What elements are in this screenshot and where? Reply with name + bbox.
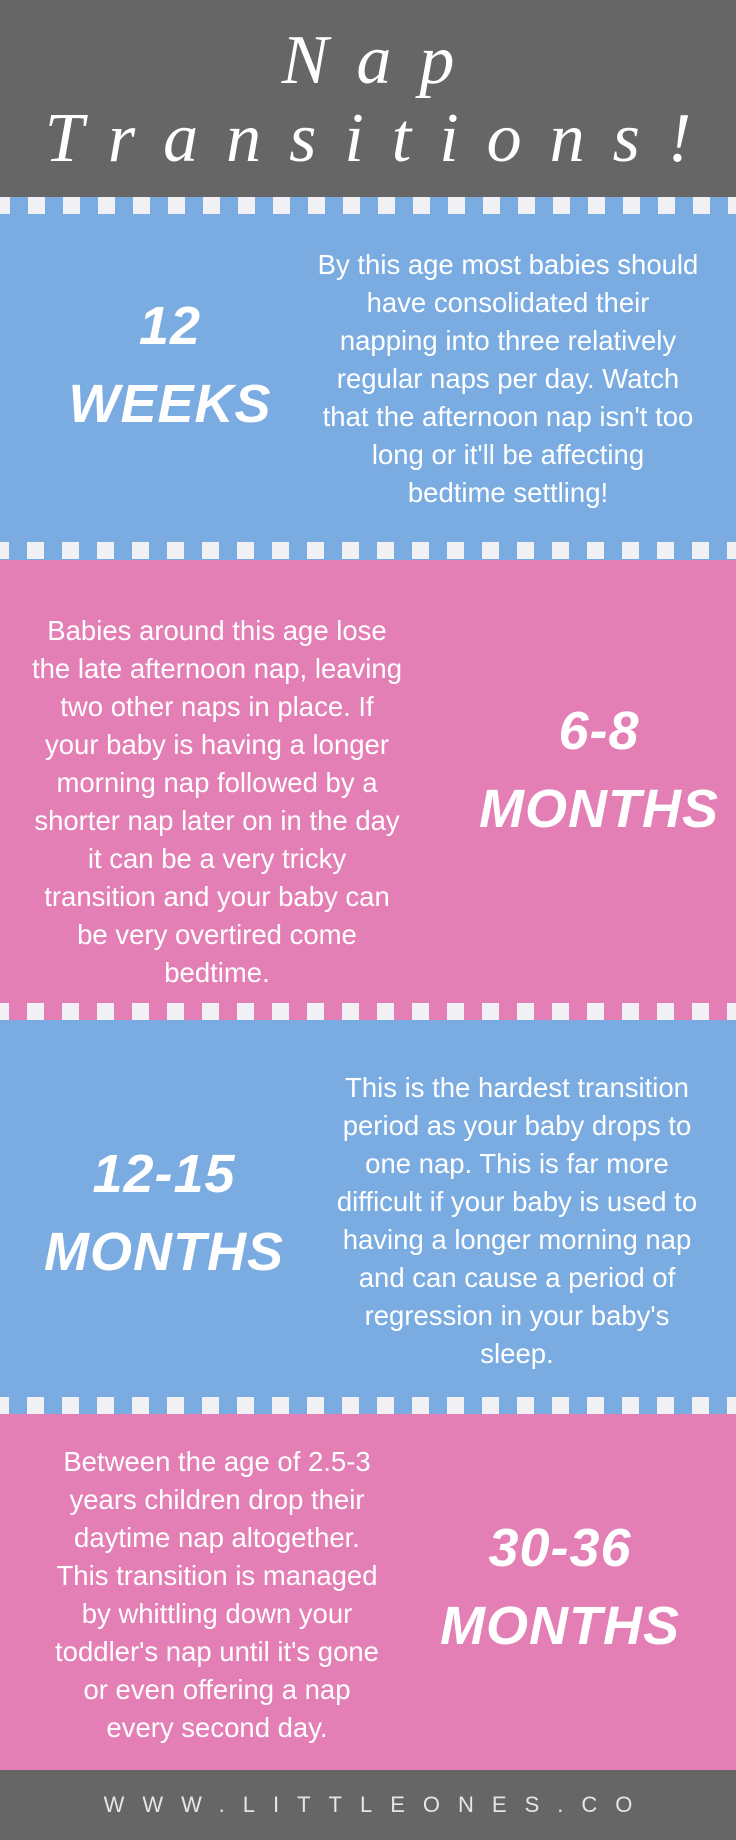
text: 12 weeks: have consolidated their — [367, 287, 649, 318]
title — [45, 22, 719, 177]
text: 12-15 months: difficult if your baby is used to — [337, 1186, 697, 1217]
text: 6-8 months: morning nap followed by a — [56, 767, 378, 798]
title: Nap — [282, 22, 482, 99]
text: 30-36 months: daytime nap altogether. — [74, 1522, 360, 1553]
text: 30-36 months: every second day. — [106, 1712, 328, 1743]
text: 12-15 months: sleep. — [480, 1338, 554, 1369]
text: 6-8 months — [32, 615, 402, 988]
label: 6-8 months — [479, 701, 719, 839]
header — [0, 0, 736, 197]
title: Transitions! — [45, 100, 719, 177]
panel: 12-15 months — [0, 1020, 736, 1414]
text: 6-8 months: be very overtired come — [77, 919, 357, 950]
text: 6-8 months: transition and your baby can — [44, 881, 390, 912]
label: 30-36 months: MONTHS — [440, 1596, 680, 1656]
label: 30-36 months — [440, 1518, 680, 1656]
text: 6-8 months: your baby is having a longer — [45, 729, 389, 760]
text: 12-15 months: one nap. This is far more — [365, 1148, 669, 1179]
text: 30-36 months: years children drop their — [69, 1484, 364, 1515]
text: 6-8 months: two other naps in place. If — [60, 691, 374, 722]
label: 12-15 months — [44, 1144, 284, 1282]
text: 12 weeks: napping into three relatively — [340, 325, 676, 356]
text: 12 weeks: By this age most babies should — [318, 249, 698, 280]
label: 12 weeks: WEEKS — [68, 374, 272, 434]
label: 12 weeks — [68, 296, 272, 434]
label: 6-8 months: 6-8 — [558, 701, 640, 761]
label: 12-15 months: MONTHS — [44, 1222, 284, 1282]
label: 12-15 months: 12-15 — [92, 1144, 236, 1204]
text: 6-8 months: shorter nap later on in the day — [34, 805, 400, 836]
text: 12 weeks: bedtime settling! — [408, 477, 608, 508]
text: 30-36 months: This transition is managed — [56, 1560, 378, 1591]
text: 12-15 months: having a longer morning nap — [343, 1224, 691, 1255]
text: 30-36 months: Between the age of 2.5-3 — [63, 1446, 371, 1477]
text: 30-36 months: by whittling down your — [82, 1598, 352, 1629]
text: 12-15 months: period as your baby drops to — [343, 1110, 691, 1141]
panel: 6-8 months — [0, 560, 736, 1020]
panel: 12 weeks — [0, 197, 736, 560]
text: 6-8 months: the late afternoon nap, leaving — [32, 653, 402, 684]
text: 12-15 months: regression in your baby's — [365, 1300, 669, 1331]
label: 12 weeks: 12 — [139, 296, 201, 356]
text: 12-15 months — [337, 1072, 697, 1369]
text: 12 weeks: regular naps per day. Watch — [337, 363, 679, 394]
label: 6-8 months: MONTHS — [479, 779, 719, 839]
footer url: WWW.LITTLEONES.CO — [104, 1792, 650, 1817]
text: 12-15 months: This is the hardest transition — [345, 1072, 689, 1103]
label: 30-36 months: 30-36 — [488, 1518, 632, 1578]
text: 12-15 months: and can cause a period of — [359, 1262, 675, 1293]
text: 12 weeks: long or it'll be affecting — [372, 439, 644, 470]
text: 12 weeks — [318, 249, 698, 508]
text: 30-36 months — [55, 1446, 379, 1743]
text: 6-8 months: it can be a very tricky — [88, 843, 346, 874]
text: 30-36 months: toddler's nap until it's gone — [55, 1636, 379, 1667]
text: 6-8 months: Babies around this age lose — [47, 615, 387, 646]
text: 12 weeks: that the afternoon nap isn't too — [323, 401, 693, 432]
text: 6-8 months: bedtime. — [164, 957, 270, 988]
text: 30-36 months: or even offering a nap — [83, 1674, 351, 1705]
panel: 30-36 months — [0, 1414, 736, 1770]
footer — [0, 1770, 736, 1840]
